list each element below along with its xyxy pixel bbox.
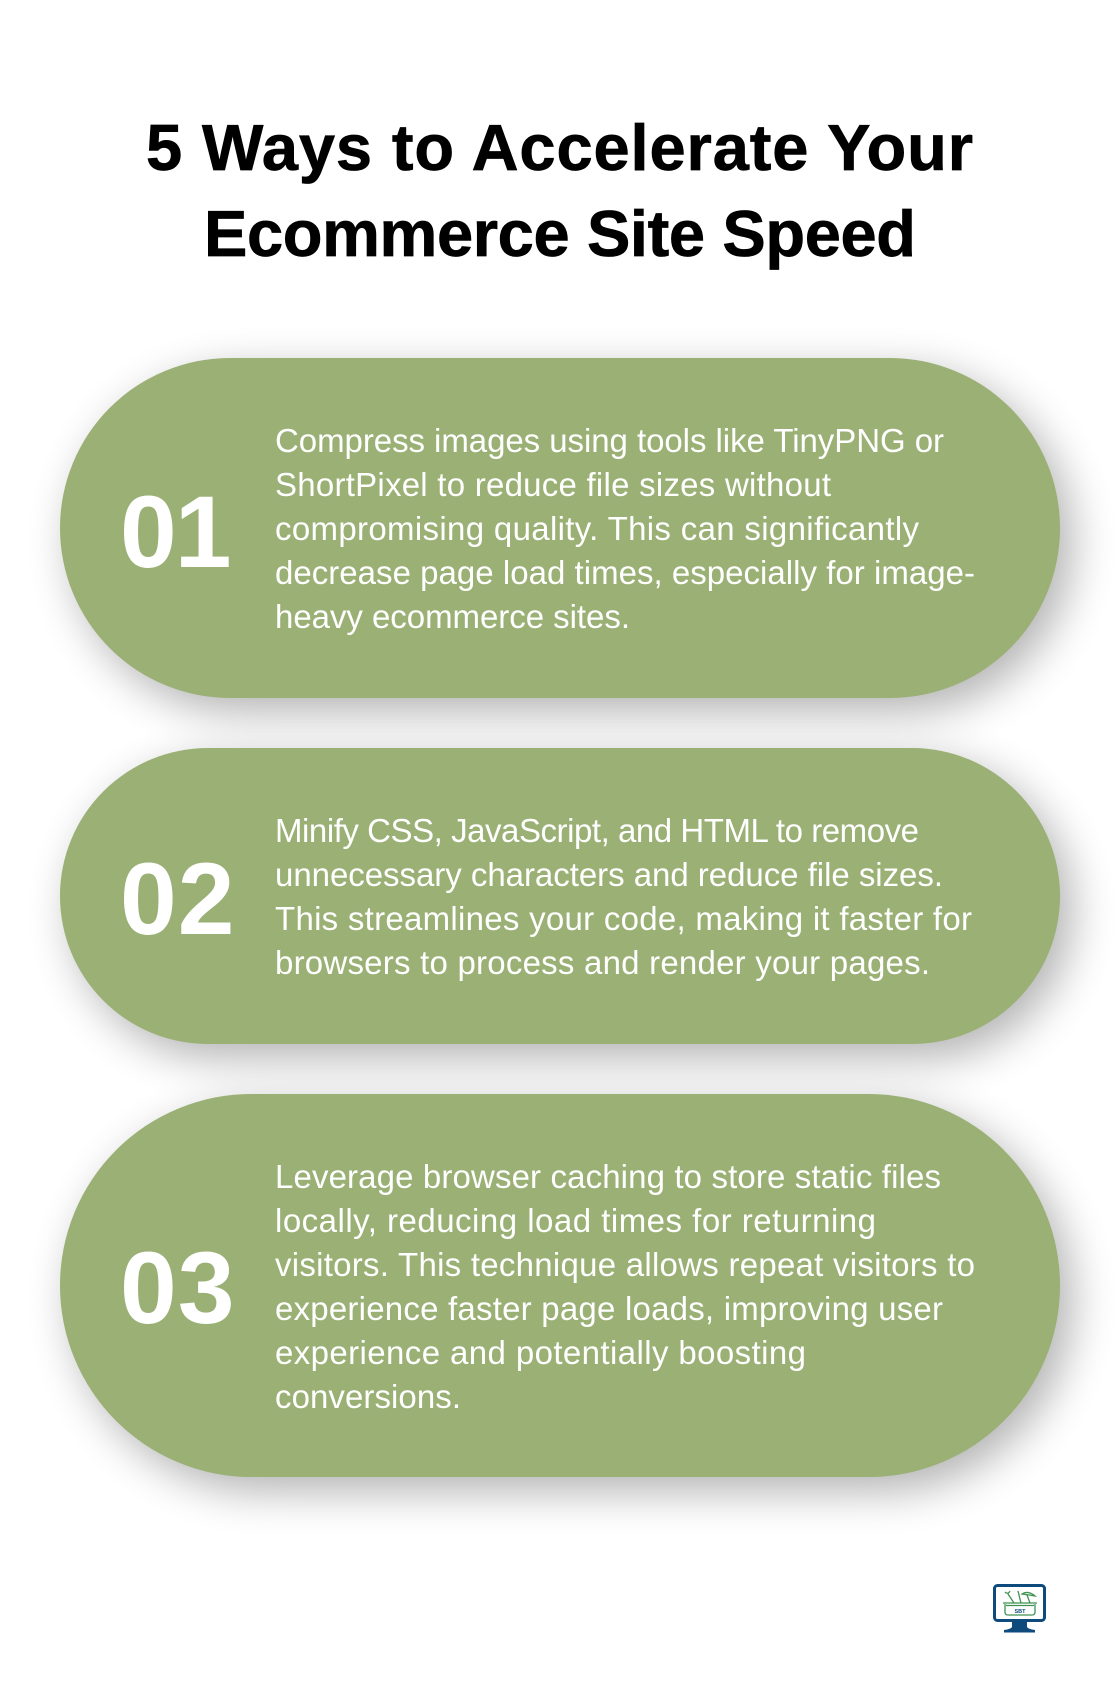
icon: monitor with toolbox logo: [994, 1586, 1044, 1632]
text: step 03 description: experience and potentially boosting: [275, 1334, 806, 1371]
title: [146, 111, 973, 270]
text: step 03 description: visitors. This technique allows repeat visitors to: [275, 1246, 975, 1283]
text: step 02 description: This streamlines your code, making it faster for: [275, 900, 972, 937]
text: step 02 description: unnecessary characters and reduce file sizes.: [275, 856, 943, 893]
text: step 01 description: decrease page load times, especially for image-: [275, 554, 975, 591]
text: step 01 description: [275, 422, 975, 635]
text: step 02 description: [275, 812, 972, 981]
text: step 03 description: [275, 1158, 975, 1415]
text: step 01 description: Compress images using tools like TinyPNG or: [275, 422, 944, 459]
text: step 01 description: heavy ecommerce sites.: [275, 598, 630, 635]
text: step 01 description: compromising quality. This can significantly: [275, 510, 920, 547]
panel: step 01: [60, 358, 1072, 712]
panel: step 03: [60, 1094, 1072, 1491]
panel: step 02: [60, 748, 1072, 1058]
text: step 03 description: conversions.: [275, 1378, 461, 1415]
text: step 03 description: experience faster page loads, improving user: [275, 1290, 943, 1327]
text: step 03 description: locally, reducing load times for returning: [275, 1202, 876, 1239]
number 03: 03: [120, 1231, 235, 1345]
number 01: 01: [120, 475, 229, 589]
icon: monitor with toolbox logo: SBT: [1014, 1609, 1026, 1615]
text: step 01 description: ShortPixel to reduce file sizes without: [275, 466, 831, 503]
text: step 03 description: Leverage browser caching to store static files: [275, 1158, 941, 1195]
title: Ecommerce Site Speed: [204, 197, 916, 270]
text: step 02 description: Minify CSS, JavaScript, and HTML to remove: [275, 812, 919, 849]
number 02: 02: [120, 842, 235, 956]
title: 5 Ways to Accelerate Your: [146, 111, 973, 184]
text: step 02 description: browsers to process and render your pages.: [275, 944, 930, 981]
